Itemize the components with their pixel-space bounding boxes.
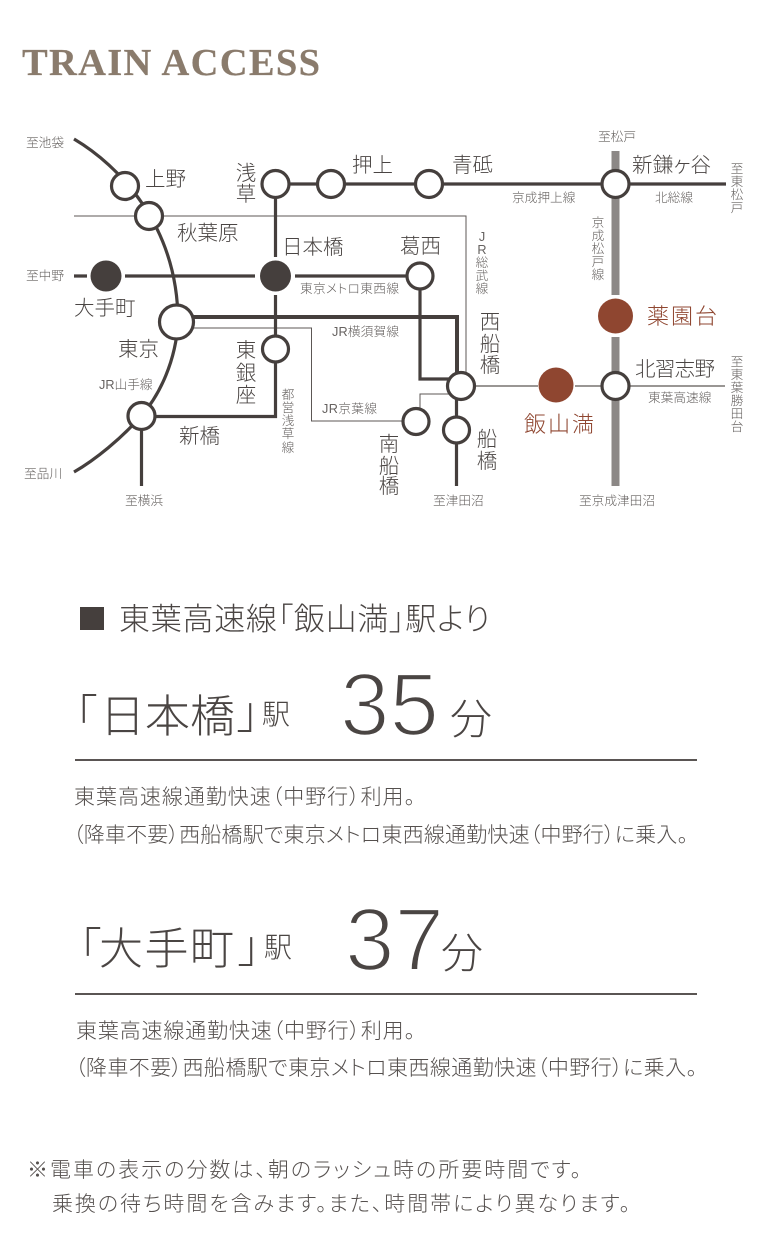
time: 37: [345, 889, 444, 989]
line and destination labels: 草: [282, 427, 294, 441]
heading marker: [80, 607, 104, 630]
station names: 大手町: [74, 297, 136, 320]
line and destination labels: 至津田沼: [433, 494, 484, 508]
route 1: Nihombashi: [73, 654, 697, 847]
time unit: 分: [450, 696, 492, 743]
line and destination labels: 松: [731, 188, 744, 202]
station names: 橋: [379, 475, 399, 498]
line and destination labels: 東葉高速線: [648, 391, 712, 405]
line and destination labels: 線: [282, 441, 295, 455]
line and destination labels: 武: [476, 269, 489, 283]
station names: 押上: [352, 154, 393, 177]
line and destination labels: 田: [731, 407, 743, 421]
line: JR Yamanote: [74, 139, 178, 472]
line and destination labels: 台: [731, 420, 743, 434]
line: Tozai: [74, 276, 461, 379]
stations: [90, 170, 633, 443]
station name: 日本橋: [100, 691, 235, 742]
line and destination labels: 至品川: [24, 467, 62, 481]
route map: [24, 130, 744, 508]
station names: 東: [236, 339, 256, 362]
station names: [74, 154, 717, 498]
line and destination labels: 勝: [731, 394, 744, 408]
time: 35: [340, 654, 439, 754]
line: Asakusa: [141, 184, 276, 416]
footnote: [27, 1159, 630, 1216]
title: TRAIN ACCESS: [22, 42, 320, 84]
station names: 船: [480, 333, 500, 356]
line and destination labels: 都: [282, 388, 295, 402]
line and destination labels: R: [477, 243, 487, 257]
line: Keisei Matsudo: [612, 151, 620, 486]
line and destination labels: 北総線: [655, 191, 693, 205]
route 1: Nihombashi: （降車不要）西船橋駅で東京メトロ東西線通勤快速（中野行）に乗入。: [73, 824, 688, 847]
line and destination labels: 至中野: [26, 269, 64, 283]
line: Funabashi branch: [455, 386, 458, 486]
station names: 船: [477, 428, 497, 451]
line and destination labels: 戸: [731, 201, 743, 215]
line and destination labels: JR京葉線: [322, 402, 377, 416]
station names: 西: [480, 311, 500, 334]
line and destination labels: 東: [731, 368, 744, 382]
rule: [75, 993, 697, 995]
line and destination labels: 松: [592, 242, 605, 256]
line and destination labels: JR山手線: [99, 378, 153, 392]
station names: 東京: [118, 338, 159, 361]
station name: 」: [238, 923, 260, 972]
rule: [75, 759, 697, 761]
station names: 船: [379, 455, 399, 478]
station names: 日本橋: [282, 236, 344, 259]
line: JR Yokosuka: [176, 317, 457, 386]
line and destination labels: 至京成津田沼: [579, 494, 655, 508]
line: Toyo Rapid: [461, 385, 725, 387]
station names: 銀: [236, 362, 256, 385]
station names: 秋葉原: [177, 222, 238, 245]
station names: 青砥: [452, 154, 493, 177]
station names: 薬園台: [647, 304, 717, 329]
line and destination labels: 線: [476, 282, 489, 296]
station names: 浅: [236, 162, 256, 185]
line and destination labels: J: [479, 230, 485, 244]
line and destination labels: 線: [592, 268, 605, 282]
line and destination labels: 総: [476, 256, 489, 270]
line: JR Sobu: [74, 216, 466, 386]
station names: 飯山満: [524, 412, 594, 437]
station name: 「: [79, 925, 101, 974]
heading: 東葉高速線「飯山満」駅より: [119, 602, 490, 637]
line and destination labels: 葉: [731, 381, 744, 395]
line: Keisei Oshiage / Hokuso: [275, 182, 726, 186]
station names: 北習志野: [635, 358, 715, 381]
line and destination labels: 戸: [592, 255, 604, 269]
description: 東葉高速線通勤快速（中野行）利用。: [74, 786, 415, 809]
line and destination labels: 京成押上線: [512, 191, 576, 205]
station names: 草: [236, 183, 256, 206]
line and destination labels: 東: [731, 175, 744, 189]
line: JR Keiyo: [176, 328, 461, 422]
line and destination labels: 至: [731, 355, 743, 369]
line and destination labels: 至横浜: [125, 494, 163, 508]
line and destination labels: 京: [592, 216, 604, 230]
station names: 橋: [480, 354, 500, 377]
line and destination labels: 成: [592, 229, 605, 243]
footnote: ※電車の表示の分数は、朝のラッシュ時の所要時間です。: [27, 1159, 581, 1182]
line and destination labels: 至池袋: [26, 136, 64, 150]
line and destination labels: JR横須賀線: [332, 325, 399, 339]
station suffix: 駅: [264, 932, 292, 963]
station name: 大手町: [99, 925, 234, 974]
line and destination labels: 営: [282, 401, 294, 415]
station names: 葛西: [400, 235, 441, 258]
station suffix: 駅: [262, 699, 290, 730]
line and destination labels: 東京メトロ東西線: [300, 282, 399, 296]
line and destination labels: 至: [731, 162, 743, 176]
time unit: 分: [441, 930, 483, 977]
station name: 「: [75, 692, 97, 741]
station names: 上野: [145, 168, 186, 191]
station names: 南: [379, 433, 399, 456]
station name: 」: [237, 689, 259, 738]
station names: 新鎌ヶ谷: [632, 154, 711, 177]
station names: 座: [236, 384, 256, 407]
line and destination labels: 浅: [282, 414, 295, 428]
route 2: Otemachi: [75, 889, 697, 1080]
description: 東葉高速線通勤快速（中野行）利用。: [76, 1020, 415, 1043]
line and destination labels: 至松戸: [598, 130, 636, 144]
line: Yokohama branch: [140, 416, 143, 486]
footnote: 乗換の待ち時間を含みます。また、時間帯により異なります。: [52, 1193, 630, 1216]
route 2: Otemachi: （降車不要）西船橋駅で東京メトロ東西線通勤快速（中野行）に乗入。: [75, 1057, 697, 1080]
station names: 新橋: [179, 425, 220, 448]
station names: 橋: [477, 450, 497, 473]
line and destination labels: [24, 130, 744, 508]
